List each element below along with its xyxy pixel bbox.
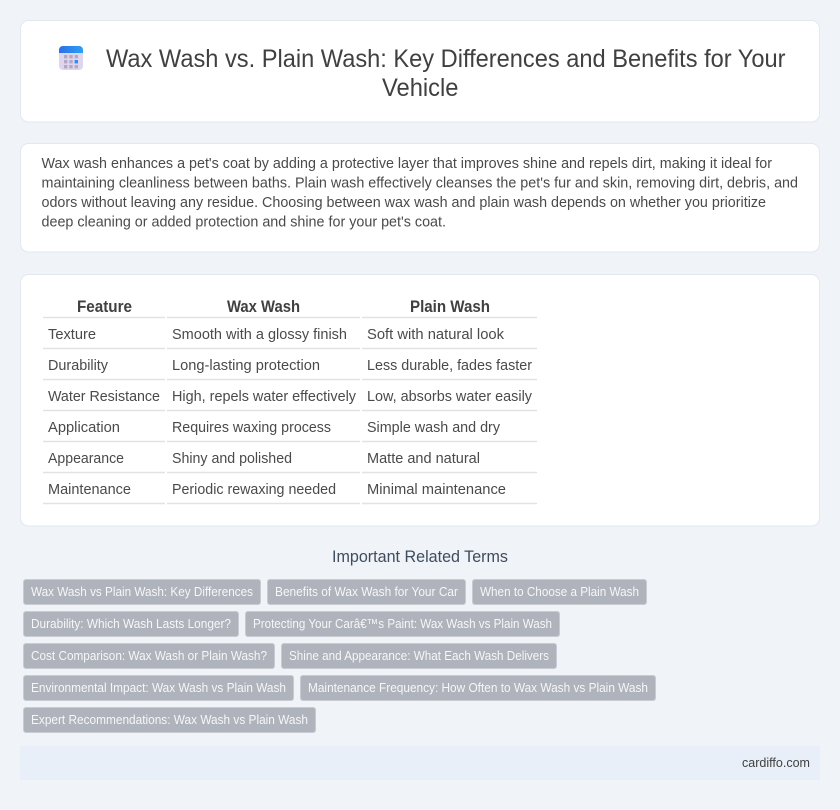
title: Vehicle	[382, 75, 458, 102]
tag: When to Choose a Plain Wash	[480, 584, 639, 599]
table row: water resistance: High, repels water effectively	[172, 389, 357, 405]
text block: summary	[42, 156, 798, 231]
table row: water resistance	[48, 389, 533, 405]
table row: texture	[48, 327, 505, 343]
panel: header card	[20, 20, 820, 122]
table row: application: Application	[48, 420, 120, 436]
table row: application	[48, 420, 501, 436]
text block: summary: maintaining cleanliness between baths. Plain wash effectively cleanses the pet's fur and skin, removing dirt, debris, and	[42, 176, 798, 192]
tag: Cost Comparison: Wax Wash or Plain Wash?	[31, 648, 267, 663]
table row: maintenance: Periodic rewaxing needed	[172, 482, 336, 498]
panel: summary paragraph	[20, 144, 820, 252]
tag	[24, 644, 274, 668]
tag	[24, 676, 294, 700]
table row: application: Simple wash and dry	[367, 420, 501, 436]
tag	[268, 580, 466, 604]
tag	[24, 580, 260, 604]
tag: Protecting Your Carâ€™s Paint: Wax Wash vs Plain Wash	[253, 616, 552, 631]
table row: durability: Long-lasting protection	[172, 358, 320, 374]
text block: summary: Wax wash enhances a pet's coat by adding a protective layer that improves shine and repels dirt, making it ideal for	[42, 156, 772, 172]
tag	[24, 612, 238, 636]
table row: maintenance: Maintenance	[48, 482, 131, 498]
tag: Shine and Appearance: What Each Wash Delivers	[289, 648, 549, 663]
tag: Benefits of Wax Wash for Your Car	[275, 584, 459, 599]
tag	[282, 644, 556, 668]
tag: Maintenance Frequency: How Often to Wax Wash vs Plain Wash	[308, 680, 648, 695]
footer bar	[20, 746, 820, 780]
table header row: Feature	[77, 298, 132, 316]
table row: maintenance	[48, 482, 506, 498]
table row: texture: Soft with natural look	[367, 327, 505, 343]
table row: texture: Texture	[48, 327, 96, 343]
title	[106, 46, 786, 102]
tag: Durability: Which Wash Lasts Longer?	[31, 616, 231, 631]
table header row	[77, 298, 490, 316]
panel: related term tags	[24, 580, 656, 732]
text block: summary: deep cleaning or added protection and shine for your pet's coat.	[42, 215, 446, 231]
icon: calendar	[59, 46, 83, 70]
table row: appearance: Appearance	[48, 451, 124, 467]
tag	[300, 676, 656, 700]
table row: water resistance: Low, absorbs water easily	[367, 389, 533, 405]
table row: appearance: Matte and natural	[367, 451, 480, 467]
heading: related terms: Important Related Terms	[332, 548, 508, 566]
table row: application: Requires waxing process	[172, 420, 331, 436]
table header row: Wax Wash	[227, 298, 300, 316]
table header row: Plain Wash	[410, 298, 490, 316]
panel: comparison table	[20, 274, 820, 526]
tag: Wax Wash vs Plain Wash: Key Differences	[31, 584, 253, 599]
tag	[246, 612, 560, 636]
table row: durability: Durability	[48, 358, 109, 374]
footer text: cardiffo.com	[742, 755, 810, 770]
tag: Expert Recommendations: Wax Wash vs Plain Wash	[31, 712, 308, 727]
table row: appearance	[48, 451, 480, 467]
text block: summary: odors without leaving any residue. Choosing between wax wash and plain wash depends on whether you prioritize	[42, 195, 766, 211]
table row: durability: Less durable, fades faster	[367, 358, 532, 374]
table row: texture: Smooth with a glossy finish	[172, 327, 347, 343]
tag	[472, 580, 646, 604]
tag: Environmental Impact: Wax Wash vs Plain Wash	[31, 680, 286, 695]
table row: appearance: Shiny and polished	[172, 451, 292, 467]
tag	[24, 708, 316, 732]
title: Wax Wash vs. Plain Wash: Key Differences and Benefits for Your	[106, 46, 786, 73]
table row: water resistance: Water Resistance	[48, 389, 160, 405]
table row: durability	[48, 358, 532, 374]
table row: maintenance: Minimal maintenance	[367, 482, 506, 498]
